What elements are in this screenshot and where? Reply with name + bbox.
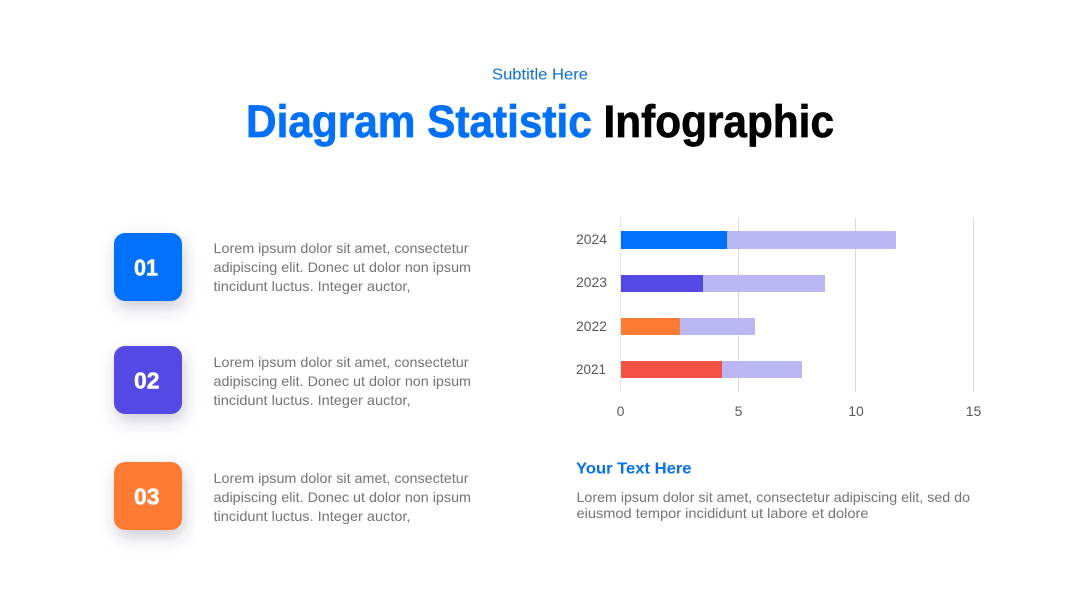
value axis labels: 5: [735, 403, 743, 419]
badge 03: [114, 462, 182, 530]
year axis labels: [576, 231, 607, 377]
text block 01: [214, 240, 471, 294]
text block 03: adipiscing elit. Donec ut dolor non ipsum: [214, 489, 471, 505]
value axis labels: 10: [848, 403, 864, 419]
text block 03: tincidunt luctus. Integer auctor,: [214, 508, 410, 524]
value axis labels: 0: [617, 403, 625, 419]
badge 01: [114, 233, 182, 301]
badge 01: 01: [134, 254, 158, 280]
bar 2022: [621, 318, 755, 335]
text block 02: Lorem ipsum dolor sit amet, consectetur: [214, 354, 469, 370]
text block 03: [214, 470, 471, 524]
year axis labels: 2022: [576, 318, 607, 334]
text block 01: adipiscing elit. Donec ut dolor non ipsum: [214, 259, 471, 275]
text block 02: tincidunt luctus. Integer auctor,: [214, 392, 410, 408]
text block 03: Lorem ipsum dolor sit amet, consectetur: [214, 470, 469, 486]
badge 02: [114, 346, 182, 414]
bar chart: [576, 218, 981, 419]
year axis labels: 2024: [576, 231, 607, 247]
list item 02: [114, 346, 471, 414]
title: Diagram Statistic Infographic: [246, 96, 834, 147]
badge 02: 02: [134, 368, 160, 394]
value axis labels: 15: [966, 403, 981, 419]
text block 01: tincidunt luctus. Integer auctor,: [214, 278, 410, 294]
text block 02: [214, 354, 471, 408]
list item 01: [114, 233, 471, 301]
bar 2021: [621, 361, 802, 378]
list item 03: [114, 462, 471, 530]
text paragraph: Lorem ipsum dolor sit amet, consectetur adipiscing elit, sed do: [576, 489, 970, 505]
text heading: Your Text Here: [576, 460, 692, 478]
bar 2023: [621, 275, 825, 292]
text block 01: Lorem ipsum dolor sit amet, consectetur: [214, 240, 469, 256]
text paragraph: [576, 489, 970, 521]
year axis labels: 2021: [576, 361, 606, 377]
text paragraph: eiusmod tempor incididunt ut labore et dolore: [576, 505, 869, 521]
year axis labels: 2023: [576, 274, 607, 290]
bar 2024: [621, 231, 896, 249]
value axis labels: [617, 403, 981, 419]
badge 03: 03: [134, 484, 160, 510]
subtitle: Subtitle Here: [492, 66, 588, 84]
text block 02: adipiscing elit. Donec ut dolor non ipsum: [214, 373, 471, 389]
